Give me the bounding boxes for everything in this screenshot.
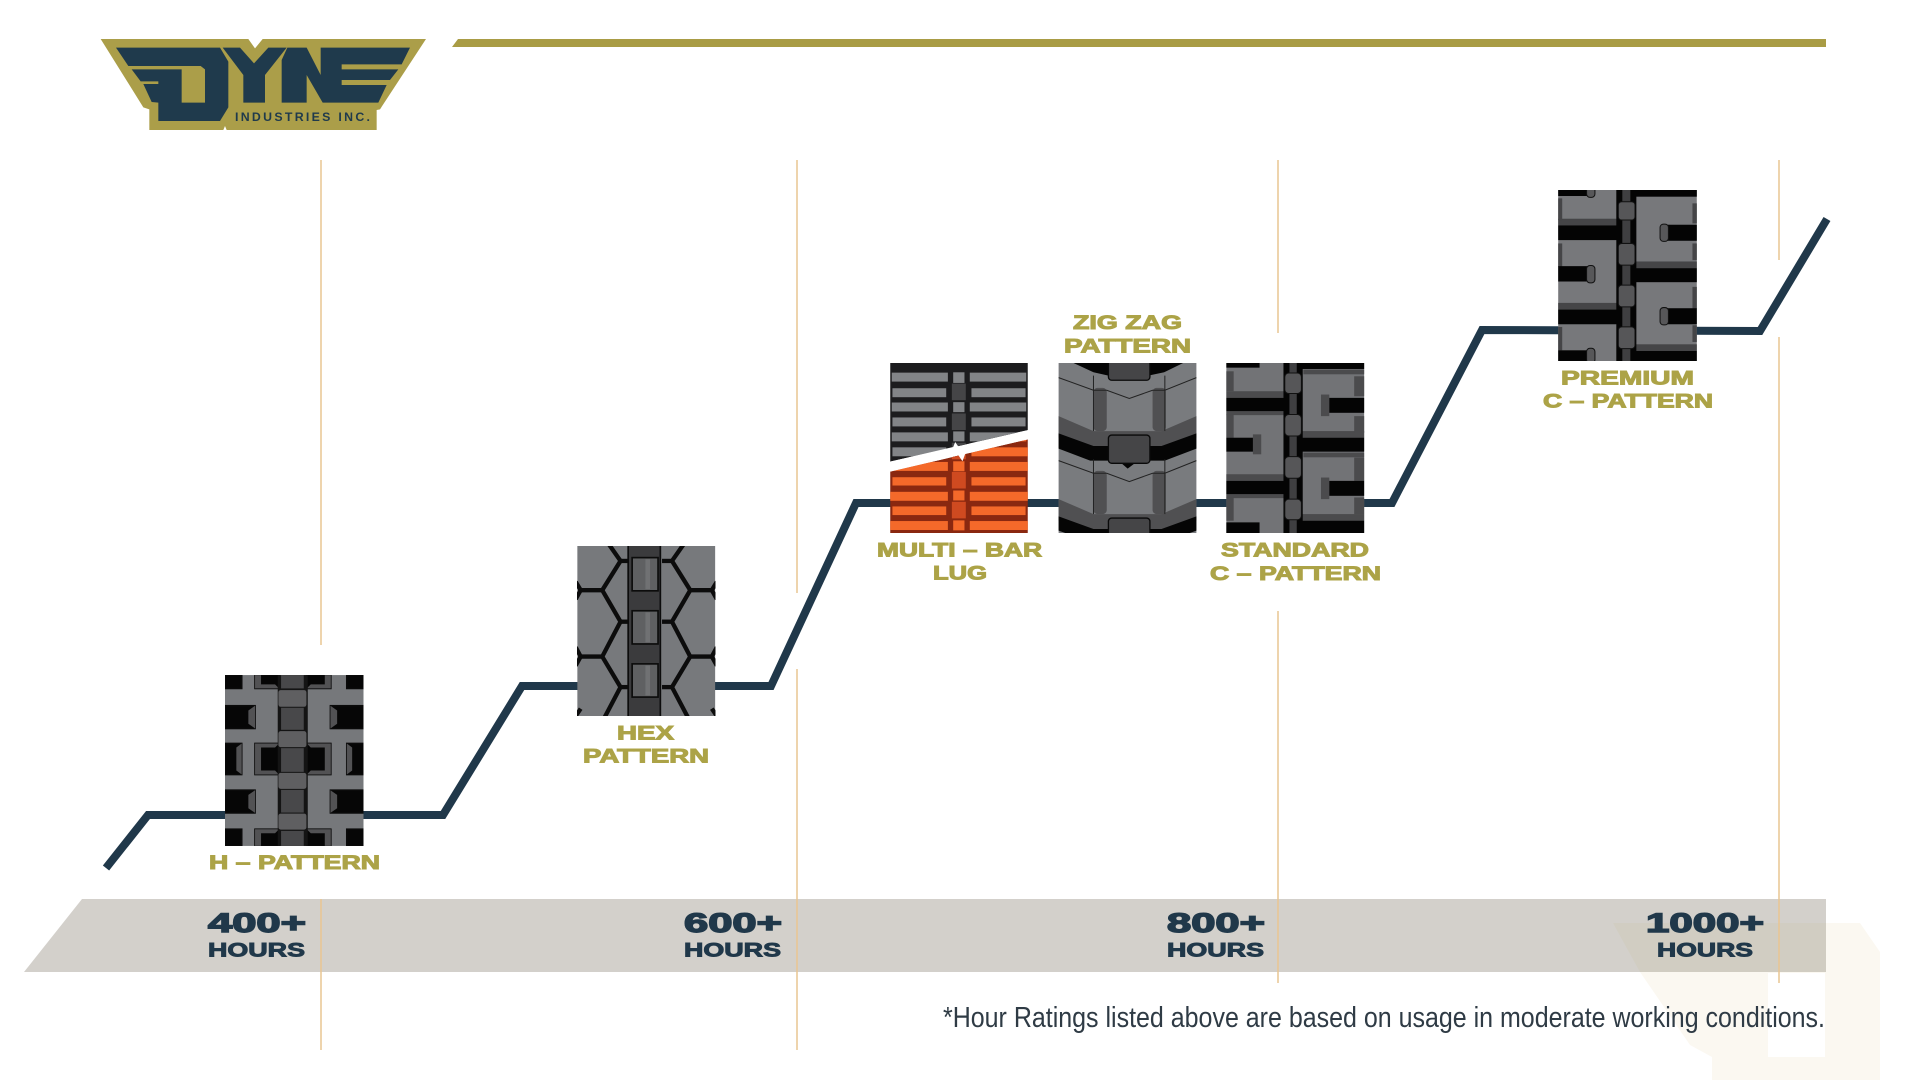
hours: 600+: HOURS bbox=[684, 940, 781, 962]
label: premium C-pattern: PREMIUM bbox=[1561, 368, 1694, 390]
hours: 400+: HOURS bbox=[208, 940, 305, 962]
tread: premium C-pattern bbox=[1558, 183, 1697, 363]
hours: 1000+: 1000+ bbox=[1646, 908, 1764, 938]
label: standard C-pattern: STANDARD bbox=[1221, 540, 1369, 562]
footnote: *Hour Ratings listed above are based on usage in moderate working conditions. bbox=[943, 1002, 1825, 1034]
hours: 1000+: HOURS bbox=[1657, 940, 1753, 962]
hours: 800+ bbox=[1167, 908, 1265, 962]
tread: multi-bar lug bbox=[890, 363, 1028, 533]
tread: H pattern bbox=[225, 675, 364, 846]
label: multi-bar lug bbox=[877, 540, 1042, 584]
white gap in watermark bbox=[1768, 973, 1825, 1057]
label: hex pattern: HEX bbox=[617, 724, 674, 744]
timeline band bbox=[24, 899, 1826, 972]
watermark: faint logo mark bbox=[1613, 923, 1880, 1080]
label: multi-bar lug: MULTI – BAR bbox=[877, 540, 1042, 562]
label: standard C-pattern: C – PATTERN bbox=[1210, 564, 1381, 585]
durability stepped line bbox=[106, 219, 1827, 868]
label: multi-bar lug: LUG bbox=[933, 564, 987, 584]
hours: 600+: 600+ bbox=[684, 908, 782, 938]
label: standard C-pattern bbox=[1210, 540, 1381, 585]
hours: 600+ bbox=[684, 908, 782, 962]
hours: 800+: HOURS bbox=[1167, 940, 1264, 962]
label: hex pattern bbox=[583, 724, 709, 768]
label: hex pattern: PATTERN bbox=[583, 746, 709, 768]
hour marker lines bbox=[321, 160, 1779, 1050]
logo: Dyne Industries Inc.: INDUSTRIES INC. bbox=[235, 110, 370, 124]
top rule bbox=[452, 39, 1826, 47]
label: H-pattern: H – PATTERN bbox=[209, 853, 380, 874]
label: premium C-pattern: C – PATTERN bbox=[1543, 392, 1713, 412]
label: zig zag pattern: PATTERN bbox=[1064, 336, 1191, 358]
hours: 400+: 400+ bbox=[208, 908, 306, 938]
tread: standard C-pattern bbox=[1226, 363, 1364, 533]
hours: 400+ bbox=[208, 908, 306, 962]
tread: zig zag pattern bbox=[1059, 352, 1196, 546]
tread: hex pattern bbox=[576, 544, 717, 719]
hours: 800+: 800+ bbox=[1167, 908, 1265, 938]
label: zig zag pattern: ZIG ZAG bbox=[1073, 313, 1182, 334]
logo: Dyne Industries Inc. bbox=[101, 39, 426, 130]
label: zig zag pattern bbox=[1064, 313, 1191, 358]
watermark tint over band bbox=[1613, 923, 1826, 972]
label: premium C-pattern bbox=[1543, 368, 1713, 412]
hours: 1000+ bbox=[1646, 908, 1764, 962]
